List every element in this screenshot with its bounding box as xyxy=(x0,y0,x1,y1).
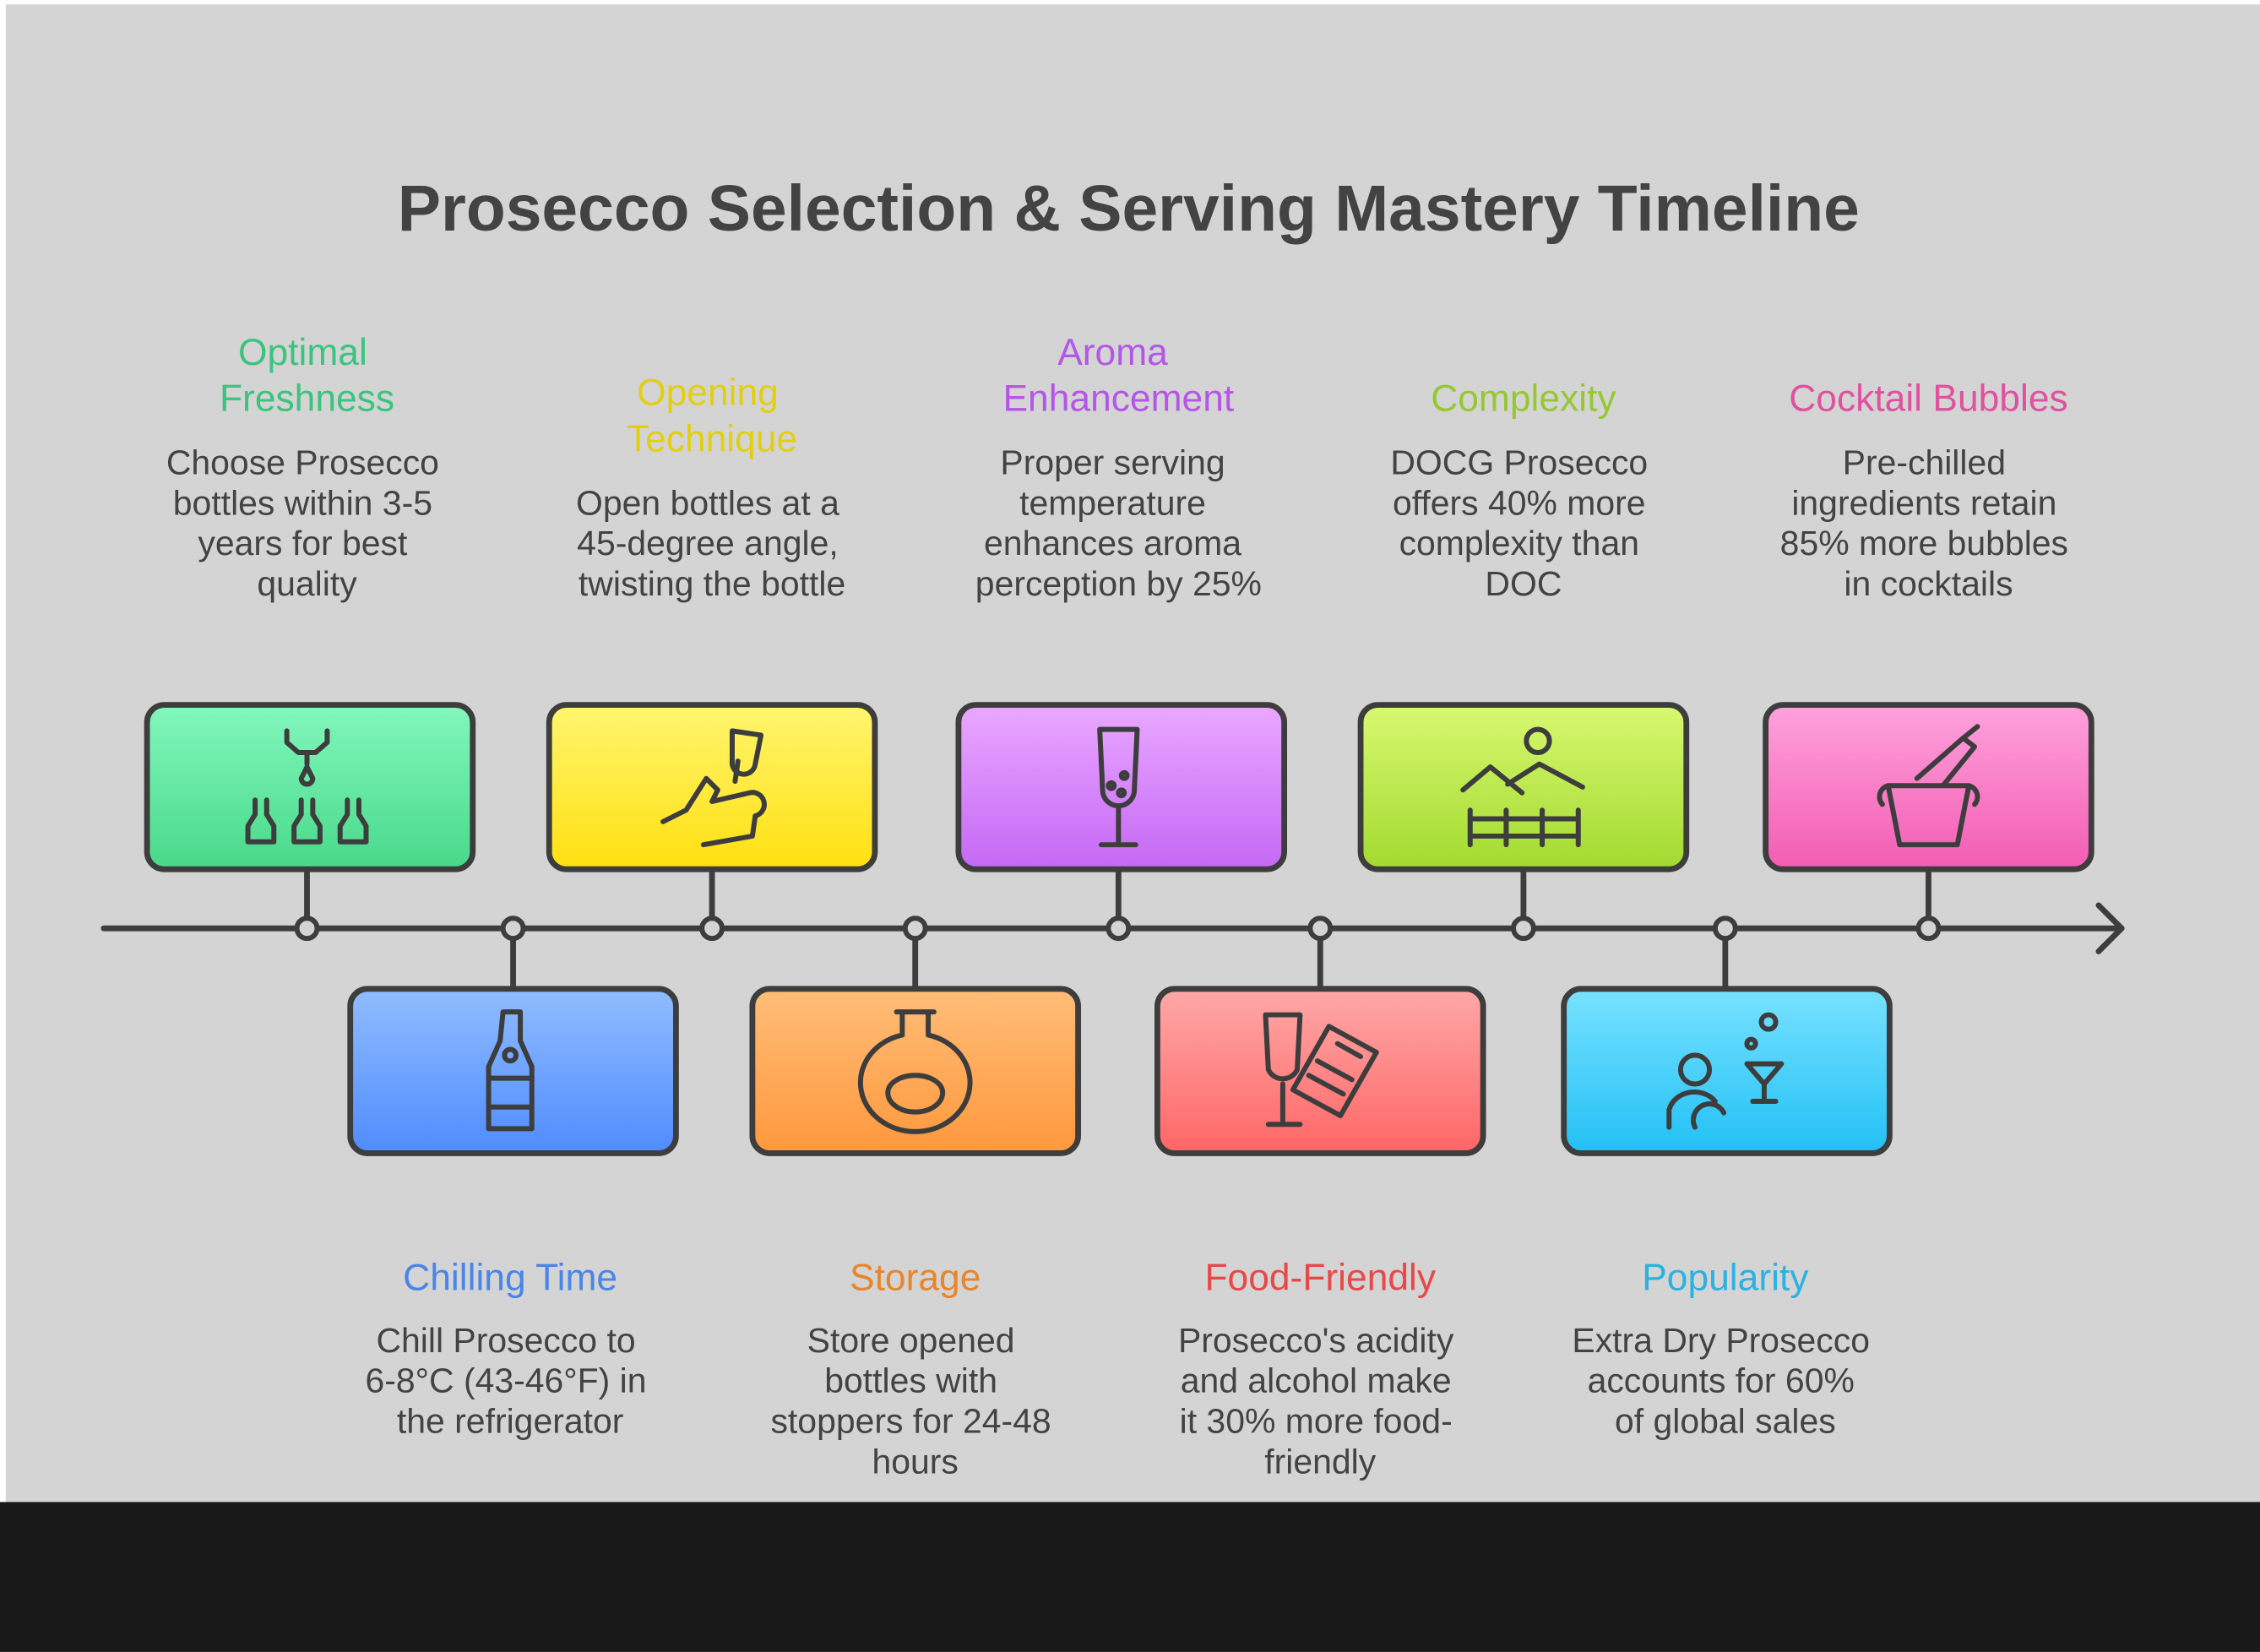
text: cocktail bubbles: Cocktail Bubbles xyxy=(1789,378,2068,419)
text: storage: bottles with xyxy=(824,1361,997,1400)
text: complexity: offers 40% more xyxy=(1393,483,1646,522)
text: aroma enhancement: perception by 25% xyxy=(975,564,1262,603)
text: food-friendly: Prosecco's acidity xyxy=(1178,1321,1454,1360)
text: cocktail bubbles: in cocktails xyxy=(1844,564,2013,603)
text: aroma enhancement: Proper serving xyxy=(1000,443,1225,482)
text: chilling time: 6-8°C (43-46°F) in xyxy=(365,1361,647,1400)
text: aroma enhancement xyxy=(975,332,1262,603)
card: storage xyxy=(752,989,1078,1153)
text: optimal freshness: Freshness xyxy=(220,378,394,419)
text: popularity: Extra Dry Prosecco xyxy=(1572,1321,1870,1360)
card: chilling time xyxy=(350,989,676,1153)
text: food-friendly: friendly xyxy=(1264,1442,1377,1481)
text: optimal freshness: bottles within 3-5 xyxy=(173,483,432,522)
text: popularity: accounts for 60% xyxy=(1588,1361,1855,1400)
text: chilling time xyxy=(365,1258,647,1440)
text: aroma enhancement: Aroma xyxy=(1057,332,1168,373)
text: cocktail bubbles: 85% more bubbles xyxy=(1780,524,2068,562)
text: food-friendly xyxy=(1178,1258,1454,1481)
card: opening technique xyxy=(549,705,875,869)
card: aroma enhancement xyxy=(959,705,1285,869)
text: opening technique xyxy=(576,372,845,603)
text: storage: Storage xyxy=(850,1258,981,1299)
text: optimal freshness xyxy=(166,332,439,603)
text: optimal freshness: years for best xyxy=(198,524,408,562)
text: optimal freshness: Choose Prosecco xyxy=(166,443,439,482)
text: popularity: of global sales xyxy=(1615,1401,1836,1440)
text: complexity: DOCG Prosecco xyxy=(1390,443,1648,482)
text: complexity: complexity than xyxy=(1399,524,1639,562)
text: storage: hours xyxy=(872,1442,959,1481)
text: aroma enhancement: temperature xyxy=(1019,483,1206,522)
text: optimal freshness: quality xyxy=(257,564,357,603)
text: aroma enhancement: enhances aroma xyxy=(984,524,1241,562)
footer bar xyxy=(0,1502,2260,1652)
text: chilling time: Chilling Time xyxy=(403,1258,617,1299)
title: Prosecco Selection & Serving Mastery Timeline xyxy=(398,172,1860,245)
text: storage: stoppers for 24-48 xyxy=(770,1401,1051,1440)
text: food-friendly: it 30% more food- xyxy=(1180,1401,1453,1440)
text: opening technique: Open bottles at a xyxy=(576,483,839,522)
text: aroma enhancement: Enhancement xyxy=(1002,378,1234,419)
text: storage: Store opened xyxy=(807,1321,1015,1360)
card: food-friendly xyxy=(1157,989,1483,1153)
text: storage xyxy=(770,1258,1051,1481)
timeline axis with arrow xyxy=(104,869,2121,989)
text: chilling time: Chill Prosecco to xyxy=(376,1321,636,1360)
card: cocktail bubbles xyxy=(1766,705,2091,869)
card: optimal freshness xyxy=(147,705,473,869)
timeline nodes xyxy=(297,918,1938,938)
text: cocktail bubbles: ingredients retain xyxy=(1791,483,2056,522)
text: opening technique: twisting the bottle xyxy=(579,564,845,603)
text: popularity: Popularity xyxy=(1642,1258,1809,1299)
text: opening technique: Opening xyxy=(637,372,779,414)
text: food-friendly: and alcohol make xyxy=(1181,1361,1452,1400)
text: food-friendly: Food-Friendly xyxy=(1204,1258,1437,1299)
text: popularity xyxy=(1572,1258,1870,1440)
text: cocktail bubbles xyxy=(1780,378,2068,603)
text: optimal freshness: Optimal xyxy=(238,332,367,373)
text: complexity xyxy=(1390,378,1648,603)
text: opening technique: Technique xyxy=(627,418,797,459)
text: cocktail bubbles: Pre-chilled xyxy=(1843,443,2006,482)
text: complexity: Complexity xyxy=(1431,378,1616,419)
card: complexity xyxy=(1361,705,1687,869)
text: chilling time: the refrigerator xyxy=(397,1401,623,1440)
text: opening technique: 45-degree angle, xyxy=(577,524,839,562)
text: complexity: DOC xyxy=(1485,564,1562,603)
card: popularity xyxy=(1564,989,1889,1153)
